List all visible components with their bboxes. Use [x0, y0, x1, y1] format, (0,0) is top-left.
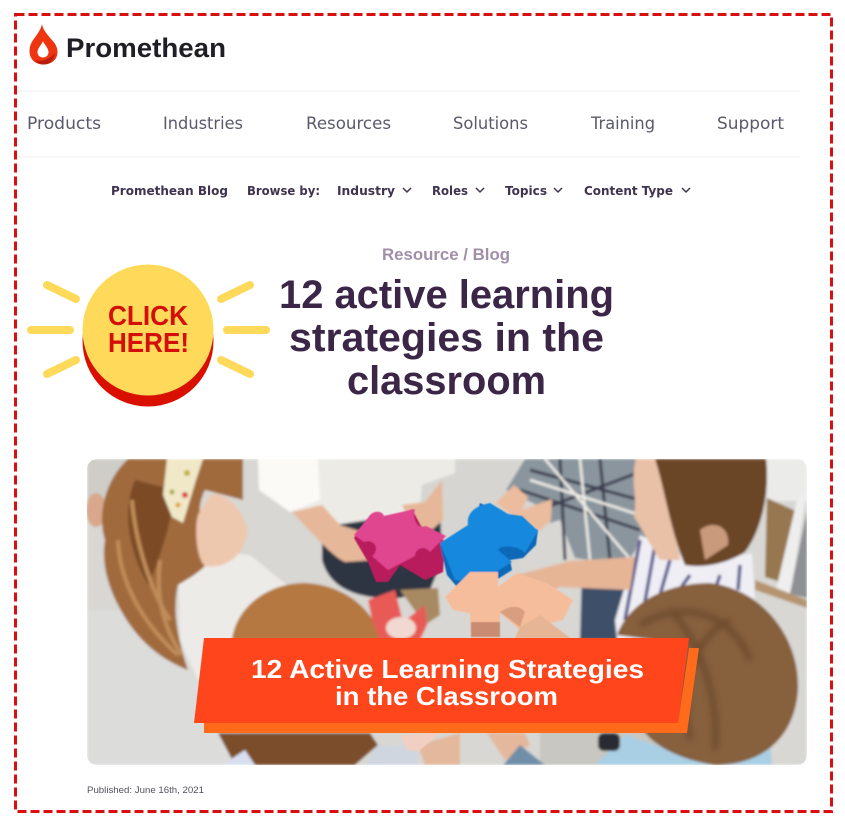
- blog sub navigation: Roles: [432, 184, 468, 198]
- girl on right with brown hair: [517, 459, 767, 640]
- blog sub navigation: Industry: [337, 184, 395, 198]
- title: [279, 273, 614, 403]
- published date: Published: June 16th, 2021: [87, 785, 204, 796]
- banner: 12 Active Learning Strategies in the Classroom: in the Classroom: [335, 681, 558, 711]
- main navigation: Products: [27, 114, 101, 133]
- main navigation: Industries: [163, 114, 243, 133]
- blog sub navigation: [111, 184, 690, 198]
- logo wordmark: Promethean: [66, 33, 226, 63]
- title: 12 active learning: [279, 273, 614, 317]
- puzzle piece: red: [368, 590, 427, 640]
- click here button: [31, 264, 266, 406]
- main navigation: [17, 91, 800, 157]
- icon: Promethean flame: [30, 24, 58, 64]
- furniture at right: [755, 459, 807, 608]
- title: classroom: [347, 359, 546, 403]
- puzzle piece: pink: [354, 509, 446, 582]
- main navigation: Resources: [306, 114, 391, 133]
- sun rays: [31, 285, 266, 374]
- click here button: CLICK: [108, 300, 188, 331]
- blog sub navigation: Topics: [505, 184, 547, 198]
- main navigation: Solutions: [453, 114, 528, 133]
- puzzle piece: peach: [445, 572, 573, 637]
- hand at bottom of photo: [400, 733, 440, 752]
- click here button: HERE!: [108, 327, 189, 358]
- banner: 12 Active Learning Strategies in the Classroom: [194, 638, 699, 733]
- foot at left edge: [86, 493, 106, 527]
- blog sub navigation: Content Type: [584, 184, 673, 198]
- child in plaid shirt: [496, 459, 650, 640]
- blog sub navigation: Browse by:: [247, 184, 320, 198]
- girl with curly hair: [102, 459, 293, 680]
- child head, bottom centre: [218, 583, 545, 765]
- eyebrow: Resource / Blog: Resource / Blog: [382, 245, 510, 264]
- puzzle piece: blue: [440, 503, 538, 587]
- hero photo: children holding puzzle pieces: [86, 459, 807, 765]
- title: strategies in the: [289, 316, 604, 360]
- blog sub navigation: Promethean Blog: [111, 184, 228, 198]
- banner: 12 Active Learning Strategies in the Classroom: 12 Active Learning Strategies: [251, 654, 644, 684]
- hand on peach puzzle piece: [515, 615, 570, 638]
- boy head, bottom right: [595, 583, 798, 765]
- header logo: [30, 24, 226, 64]
- main navigation: Training: [590, 114, 655, 133]
- main navigation: Support: [717, 114, 785, 133]
- standing child in white top: [258, 459, 455, 625]
